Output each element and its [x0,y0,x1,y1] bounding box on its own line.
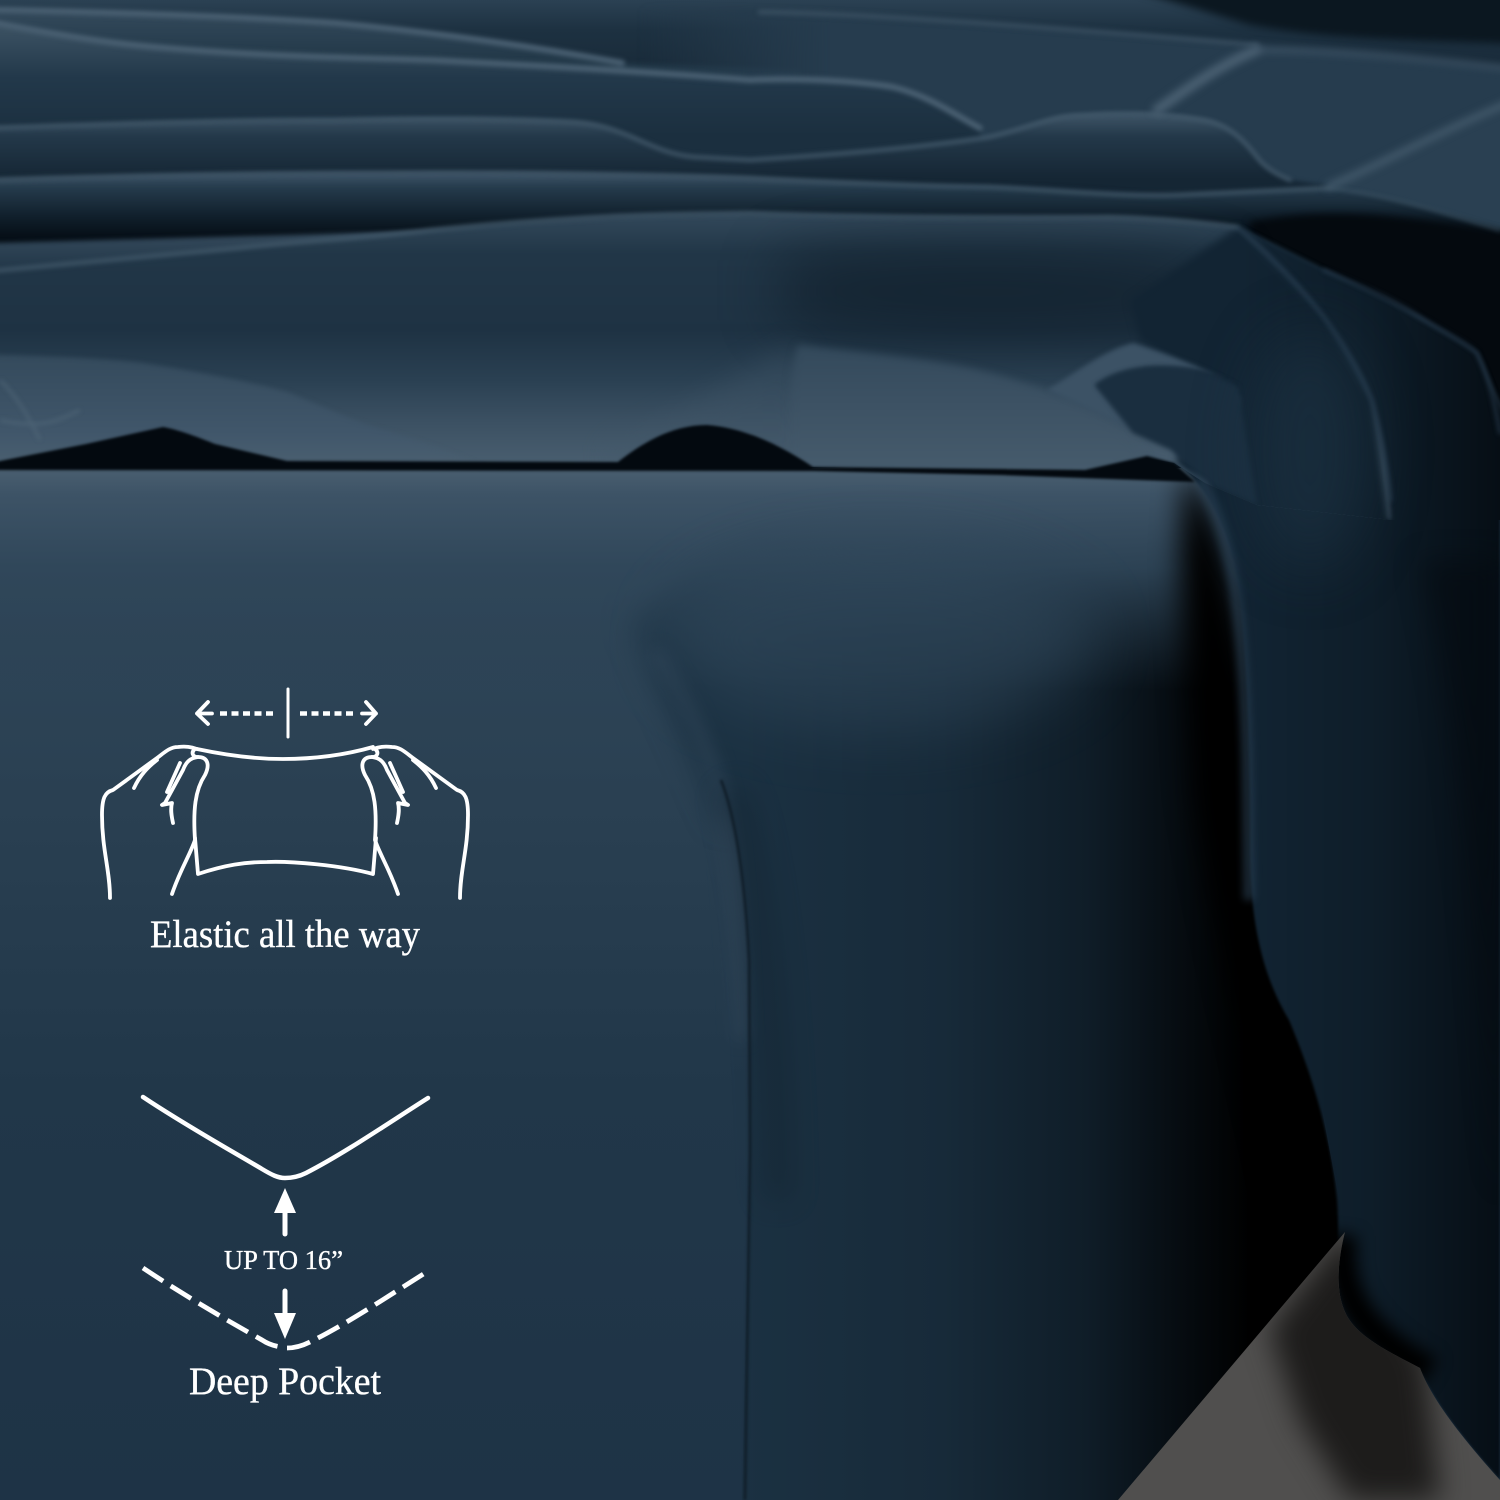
mattress right face lower [721,780,1345,1500]
icon: elastic all the way [102,689,468,898]
right face soft light [670,550,1090,730]
mattress top lit area [0,468,1260,690]
right lit panel [795,344,1068,407]
fold highlights [0,9,1500,520]
mattress right face upper [630,470,1260,820]
icon: right dashed arrow [300,702,376,724]
thin band [0,229,424,271]
hem shadow gaps [0,425,1195,482]
fold band 2 [0,28,980,157]
mattress left face [0,465,800,1500]
right back panel [722,22,1500,184]
hanging drape [1174,400,1500,1480]
icon: stretched fabric [195,747,376,874]
label: deep pocket: Deep Pocket [189,1360,381,1403]
right lit soft lead-in [756,359,788,386]
inner fold [1095,366,1257,505]
icon: fitted curve dashed [143,1268,425,1348]
left hem lobe [0,354,320,412]
corner seam shadow [730,790,778,1200]
main sheet band [0,213,1500,520]
top cloth [0,0,1500,530]
corner shoulder highlight [655,650,741,1040]
corner seam [721,780,750,1500]
icon: down arrow [274,1291,296,1339]
darker fold right [1130,227,1391,530]
soft crease highlights [1157,50,1500,186]
icon: right hand [362,747,468,898]
icon: up arrow [274,1188,296,1234]
label: elastic all the way: Elastic all the way [150,913,420,956]
drape dark right strip [1420,560,1500,1200]
drape dark pit [1341,1235,1430,1372]
label: up to 16 inches: UP TO 16” [224,1245,343,1275]
right lit fold [1052,342,1210,409]
icon: fitted curve solid [143,1097,428,1178]
upper right dark corner [1133,0,1500,45]
band under hump [0,172,1500,244]
hump fold band [0,115,1324,194]
icon: centre divider [286,689,290,737]
right lit wedge [1329,90,1500,245]
black pit on right [1250,210,1500,395]
drape lit edge [1200,480,1249,900]
small hem puckers [28,422,34,426]
black shadow beside drape [1180,470,1345,1290]
back layer [0,0,1500,62]
icon: left hand [102,747,208,898]
fold band 1 [0,14,712,71]
drape soft light [1250,330,1370,570]
icon: left dashed arrow [197,702,273,724]
second drape panel [1252,237,1500,520]
dark sheet hollow [780,246,1230,338]
icon: deep pocket diagram [143,1097,428,1348]
floor [1100,1220,1500,1500]
